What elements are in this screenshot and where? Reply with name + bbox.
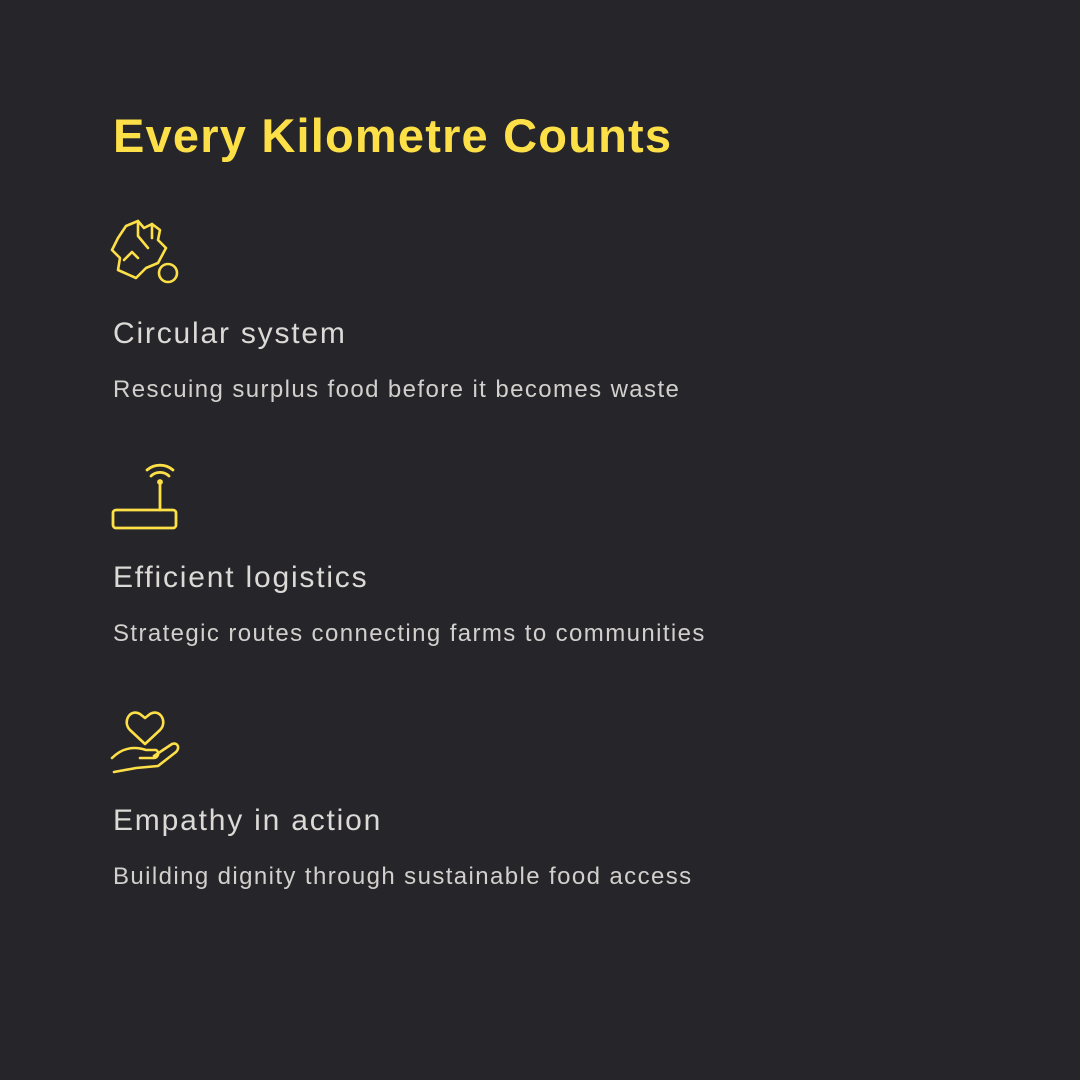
text: empathy: Building dignity through sustainable food access — [113, 863, 693, 890]
icon: router — [112, 464, 178, 530]
heading: empathy: Empathy in action — [113, 804, 382, 837]
title: Every Kilometre Counts — [113, 109, 672, 162]
heading: circular system: Circular system — [113, 317, 347, 350]
heading: efficient logistics: Efficient logistics — [113, 561, 368, 594]
icon: heart in hand — [110, 711, 180, 774]
text: logistics: Strategic routes connecting farms to communities — [113, 620, 706, 647]
icon: rock with circle — [110, 220, 178, 284]
text: circular: Rescuing surplus food before it becomes waste — [113, 376, 680, 403]
